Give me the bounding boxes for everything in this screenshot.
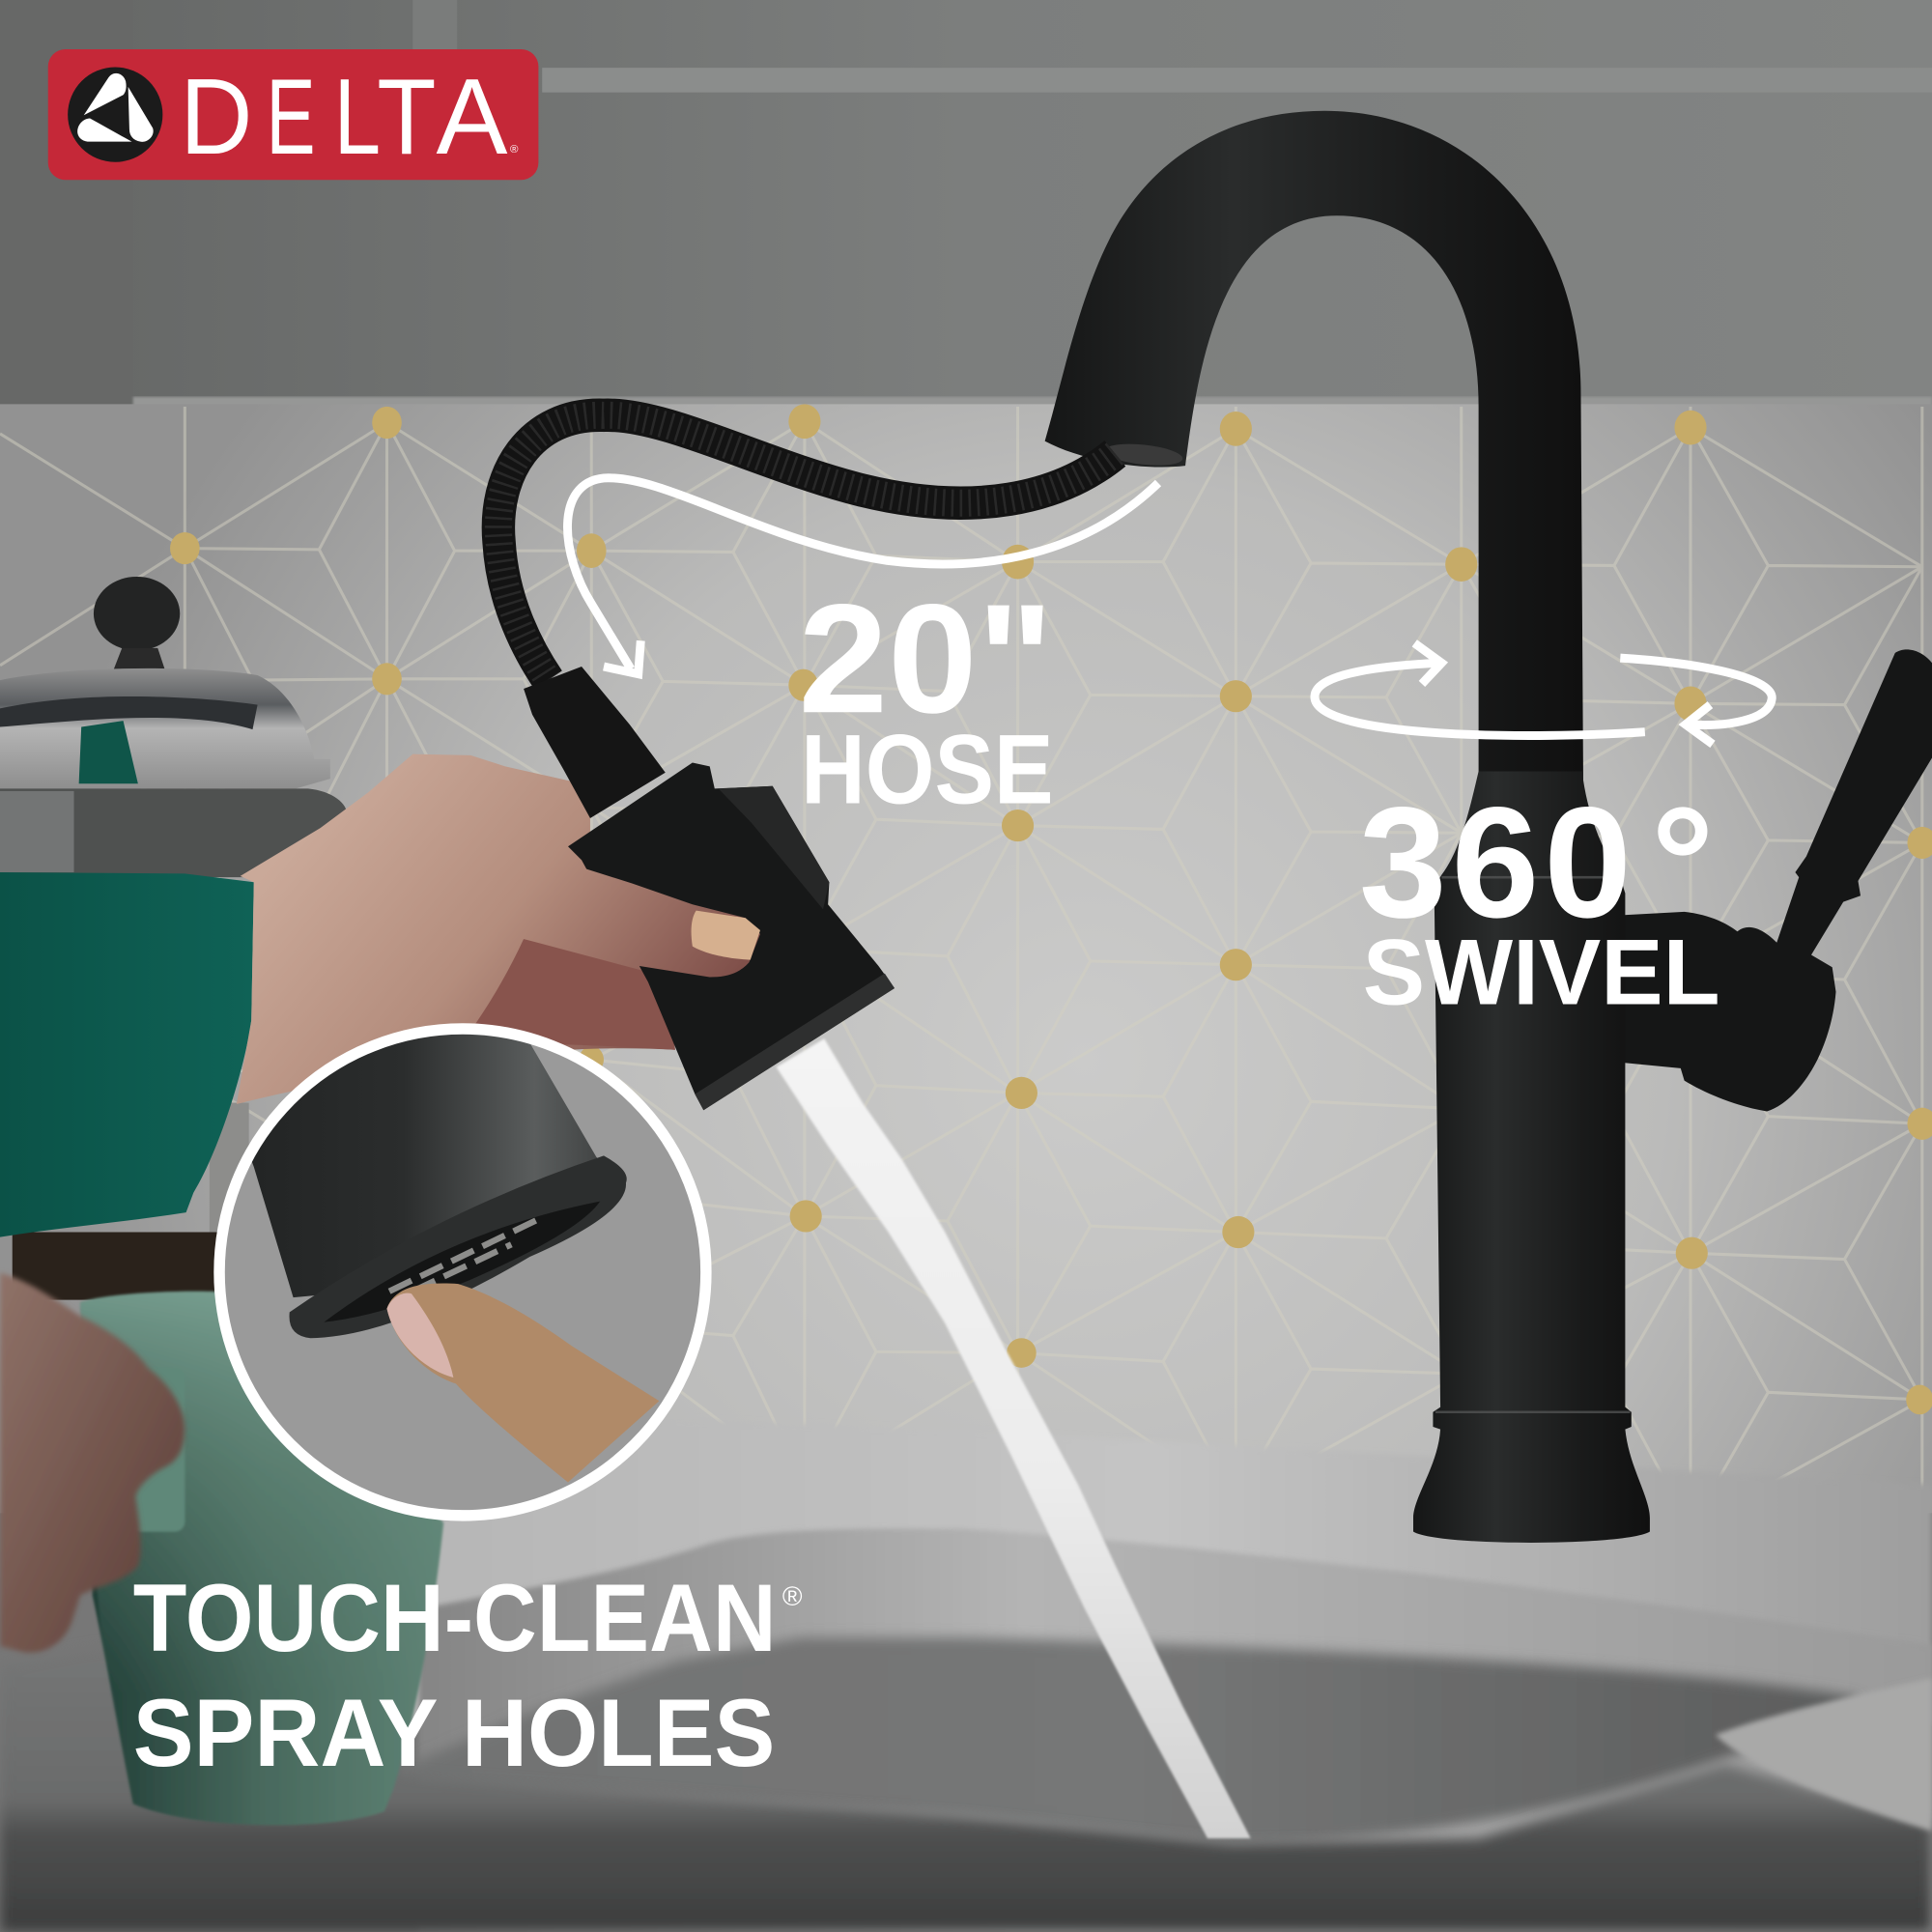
heading: 20 inch hose: 20" [799,573,1054,746]
arrow: swivel rotation [1315,643,1772,744]
thumb nail [692,911,760,960]
trigger [719,786,829,909]
logo: Delta: ® [510,144,519,156]
fingernail [387,1293,453,1378]
logo wordmark: A [437,57,508,177]
press coffee [13,1233,234,1300]
dish at right edge [1716,1678,1932,1831]
lower hand holding mug [0,1273,185,1653]
press glass [0,788,348,877]
heading: touch-clean spray holes: SPRAY HOLES [133,1680,775,1787]
background: tile wall [0,404,1932,1528]
background: upper wall and shelf [0,0,1932,419]
callout: zoomed spray face [213,1023,712,1521]
mug [80,1292,443,1825]
fingers behind head [458,939,675,1050]
spray nozzles [389,1220,537,1292]
heading: touch-clean spray holes: ® [782,1581,803,1611]
logo wordmark: D [180,57,252,177]
thumb [469,850,760,977]
heading: touch-clean spray holes [133,1565,803,1787]
logo wordmark: L [334,57,381,177]
zoomed spray head body [252,1034,597,1298]
heading: 360 degree swivel: SWIVEL [1363,920,1720,1025]
logo mark [68,68,162,162]
faucet body [1413,771,1650,1543]
water stream [777,1038,1251,1838]
press knob [94,577,180,650]
hand holding spray head [237,754,675,1104]
heading: 360 degree swivel [1359,774,1720,1025]
coffee press [0,577,348,1300]
heading: 20 inch hose: HOSE [801,715,1054,825]
hose connector [524,667,666,818]
logo wordmark: T [377,57,437,177]
heading: 360 degree swivel: 360° [1359,774,1714,951]
logo wordmark: E [267,57,316,177]
body ring highlight [1435,877,1631,1412]
logo wordmark [180,57,508,177]
lever handle [1570,649,1932,1112]
faucet [1045,111,1932,1543]
head body [568,763,895,1110]
spout outlet [1103,440,1183,469]
fingertip [387,1284,659,1482]
press lid [0,668,330,788]
spray head [524,667,895,1110]
heading: touch-clean spray holes: TOUCH-CLEAN [133,1565,777,1672]
arrow: hose length [567,478,1158,674]
pull-down hose [498,415,1115,680]
spray face opening [324,1202,600,1322]
spray face rim [290,1155,627,1338]
head rim [695,974,895,1110]
mug handle [124,1368,185,1531]
sleeve [0,872,254,1237]
logo: Delta [48,49,538,180]
spout [1045,111,1583,788]
countertop and sink [0,1419,1932,1932]
heading: 20 inch hose [799,573,1054,825]
